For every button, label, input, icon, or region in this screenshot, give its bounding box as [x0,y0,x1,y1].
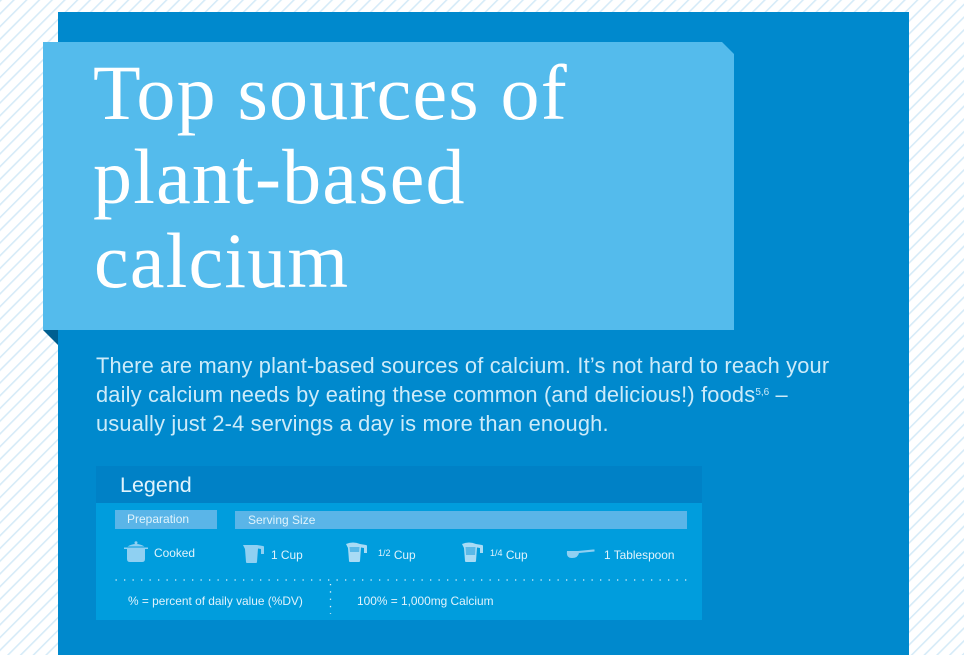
title banner [43,42,734,345]
serving size header [235,511,687,529]
legend panel [96,466,702,620]
legend header [96,466,702,503]
label: 1 cup: 1 Cup [271,548,303,562]
label: quarter cup: 1/4 Cup [490,548,528,562]
title [93,49,568,304]
icon: 1 cup [243,545,264,563]
dotted dividers [116,579,686,614]
icon: quarter cup [462,542,483,562]
intro text [96,353,829,436]
title: calcium [94,217,349,304]
label: cooked: Cooked [154,546,195,560]
title: plant-based [93,133,466,220]
icon: half cup [346,542,367,562]
serving size header: Serving Size [248,513,315,527]
label: half cup: 1/2 Cup [378,548,416,562]
preparation header [115,510,217,529]
title: Top sources of [93,49,568,136]
intro text: There are many plant-based sources of calcium. It’s not hard to reach your [96,353,829,378]
note: percent of daily value: % = percent of daily value (%DV) [128,594,303,608]
icon: cooked pot [124,541,148,562]
note: 100 percent equals: 100% = 1,000mg Calcium [357,594,494,608]
intro text: usually just 2-4 servings a day is more than enough. [96,411,609,436]
preparation header: Preparation [127,512,189,526]
intro text: daily calcium needs by eating these common (and delicious!) foods5,6 – [96,382,788,407]
legend heading: Legend [120,473,192,497]
icon: tablespoon [566,550,594,558]
label: 1 tablespoon: 1 Tablespoon [604,548,675,562]
